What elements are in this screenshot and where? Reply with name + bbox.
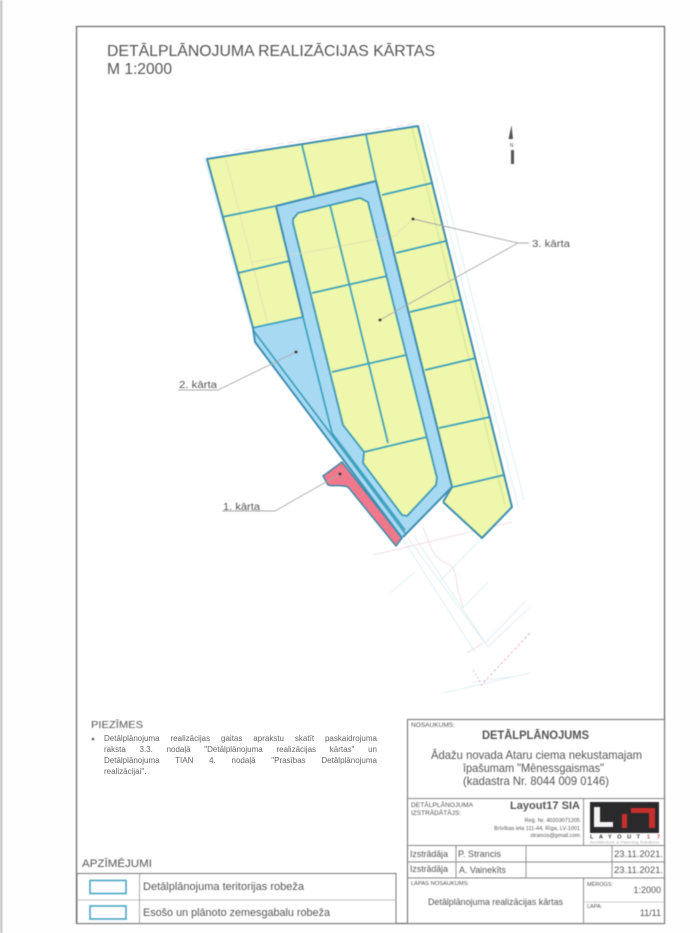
title [107, 43, 435, 78]
territory boundary [207, 126, 512, 538]
sheet info: 1:2000 [633, 885, 661, 895]
notes bullet [92, 738, 94, 740]
name section: DETĀLPLĀNOJUMS [482, 730, 589, 742]
legend label: territory boundary: Detālplānojuma teritorijas robeža [143, 881, 305, 893]
stage 1: pink area [323, 462, 402, 546]
faint lines in parcels [226, 160, 413, 325]
north arrow [508, 125, 514, 164]
sheet info: Detālplānojuma realizācijas kārtas [428, 897, 563, 907]
title block [408, 720, 664, 924]
logo: Layout17 [590, 802, 660, 844]
callout: 3. kārta: 3. kārta [532, 239, 570, 250]
notes text: Detālplānojuma TIAN 4. nodaļā "Prasības Detālplānojuma [104, 756, 377, 765]
legend table [77, 874, 396, 924]
callout: 2. kārta: 2. kārta [179, 380, 217, 391]
logo: Layout17: LAYOUT [590, 834, 641, 840]
stage 2: blue road and area [253, 181, 452, 538]
logo: Layout17: 17 [647, 834, 660, 840]
developer section: IZSTRĀDĀTĀJS: [411, 810, 461, 817]
faint surrounding survey lines [204, 122, 530, 693]
callout: 2. kārta [178, 351, 297, 391]
developer section: Brīvības iela 111-44, Rīga, LV-1001 [494, 826, 580, 832]
developer section: strancis@gmail.com [530, 833, 580, 839]
parcel boundaries [222, 135, 504, 533]
inner parcels block [293, 198, 437, 516]
legend swatch: parcel boundary [90, 906, 126, 919]
name section: Ādažu novada Ataru ciema nekustamajam [431, 748, 642, 762]
sheet info: 11/11 [640, 908, 661, 918]
signatures: 23.11.2021. [614, 865, 663, 875]
signatures: Izstrādāja [410, 864, 448, 874]
signatures: P. Strancis [458, 849, 502, 859]
logo: Layout17: Architecture & Planning Solutions [590, 840, 660, 844]
name section: NOSAUKUMS: [411, 723, 455, 729]
name section [411, 723, 642, 788]
scan edge [0, 0, 2, 933]
name section: (kadastra Nr. 8044 009 0146) [463, 774, 609, 788]
signatures [410, 849, 663, 875]
notes text [104, 734, 377, 776]
developer section [411, 800, 580, 839]
sheet info: LAPA: [587, 904, 603, 910]
title: DETĀLPLĀNOJUMA REALIZĀCIJAS KĀRTAS [107, 43, 435, 60]
notes text: Detālplānojuma realizācijas gaitas aprakstu skatīt paskaidrojuma [104, 734, 377, 743]
developer section: DETĀLPLĀNOJUMA [411, 802, 473, 809]
legend heading: APZĪMĒJUMI [82, 858, 152, 870]
notes heading: PIEZĪMES [91, 719, 143, 731]
signatures: 23.11.2021. [614, 849, 663, 859]
title: M 1:2000 [107, 61, 172, 78]
callout: 3. kārta [379, 218, 570, 321]
developer section: Reģ. Nr. 40203071205 [525, 817, 580, 824]
stage 3: yellow parcels [207, 126, 512, 538]
callout: 1. kārta [222, 473, 341, 513]
notes text: raksta 3.3. nodaļā "Detālplānojuma realizācijas kārtas" un [104, 745, 377, 754]
sheet info: LAPAS NOSAUKUMS: [411, 881, 469, 887]
callout: 1. kārta: 1. kārta [223, 502, 260, 513]
legend swatch: territory boundary [90, 880, 126, 894]
legend label: parcel boundary: Esošo un plānoto zemesgabalu robeža [143, 907, 331, 919]
developer section: Layout17 SIA [510, 800, 580, 812]
site plan map [204, 122, 530, 693]
notes text: realizācijai". [104, 767, 146, 776]
name section: īpašumam "Mēnessgaismas" [463, 761, 604, 775]
signatures: Izstrādāja [410, 849, 448, 859]
north arrow: N [510, 143, 514, 149]
sheet info: MĒROGS: [587, 881, 613, 888]
sheet info [411, 881, 661, 918]
signatures: A. Vainekīts [459, 865, 506, 875]
